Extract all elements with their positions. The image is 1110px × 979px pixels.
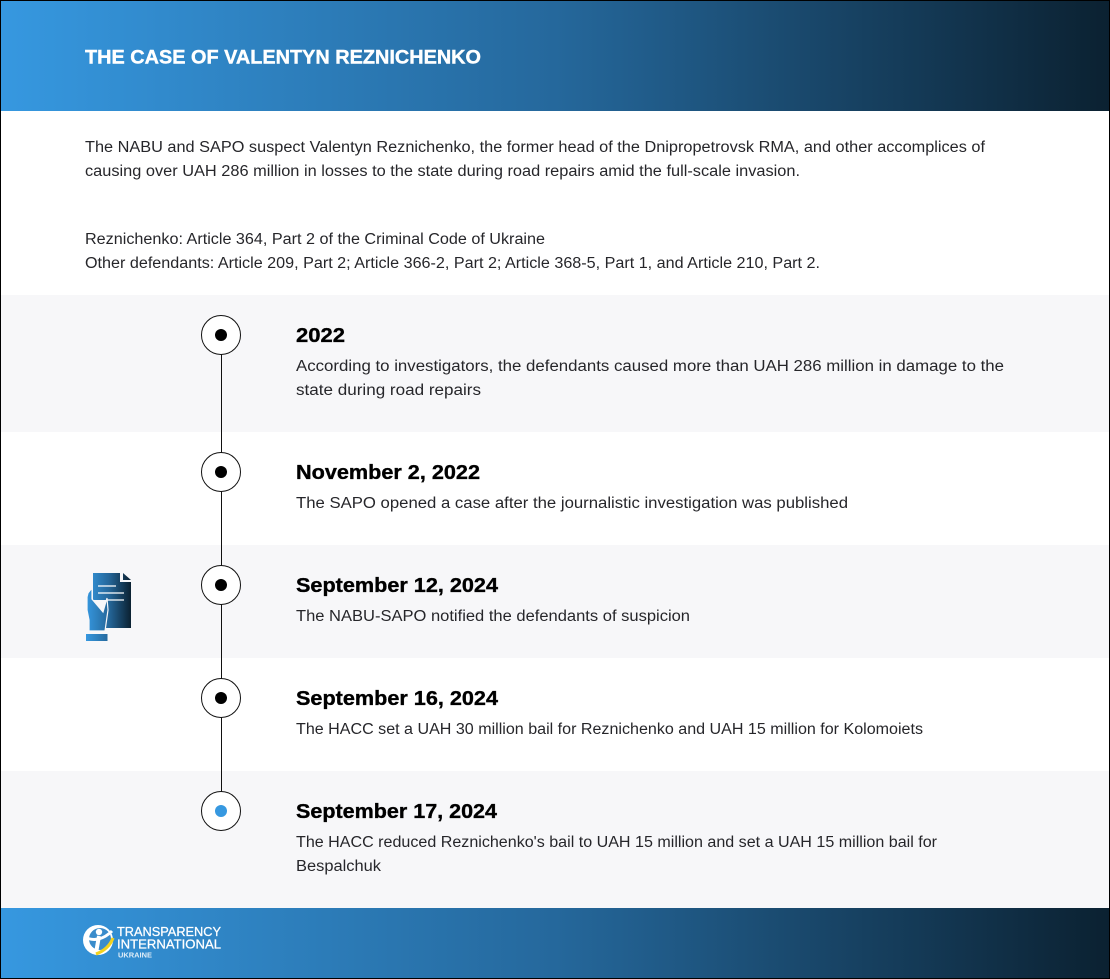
icon: hand holding document xyxy=(86,573,131,641)
event: November 2, 2022: The SAPO opened a case after the journalistic investigation was published xyxy=(296,495,848,512)
event: September 17, 2024: Bespalchuk xyxy=(296,858,381,875)
event: November 2, 2022 xyxy=(296,462,848,512)
legal articles text: Other defendants: Article 209, Part 2; Article 366-2, Part 2; Article 368-5, Part 1, and Article 210, Part 2. xyxy=(85,255,820,272)
event: November 2, 2022: November 2, 2022 xyxy=(296,462,480,484)
event: September 16, 2024 xyxy=(296,688,923,738)
event: September 17, 2024: September 17, 2024 xyxy=(296,801,498,823)
timeline marker: September 12, 2024 xyxy=(202,566,240,604)
legal articles text: Reznichenko: Article 364, Part 2 of the Criminal Code of Ukraine xyxy=(85,231,545,248)
event: 2022: 2022 xyxy=(296,325,345,347)
event: September 16, 2024: September 16, 2024 xyxy=(296,688,499,710)
intro text: The NABU and SAPO suspect Valentyn Reznichenko, the former head of the Dnipropetrovsk RMA, and other accomplices of xyxy=(85,139,986,156)
event: September 12, 2024: September 12, 2024 xyxy=(296,575,499,597)
logo: Transparency International Ukraine: INTERNATIONAL xyxy=(117,938,221,952)
intro text: causing over UAH 286 million in losses to the state during road repairs amid the full-scale invasion. xyxy=(85,163,800,180)
legal articles text xyxy=(85,231,820,272)
logo: Transparency International Ukraine xyxy=(83,925,222,960)
intro text xyxy=(85,139,986,180)
logo: Transparency International Ukraine: TRANSPARENCY xyxy=(117,925,222,939)
timeline connector line xyxy=(220,335,222,811)
event: 2022: According to investigators, the defendants caused more than UAH 286 million in damage to the xyxy=(296,358,1004,375)
event: September 12, 2024: The NABU-SAPO notified the defendants of suspicion xyxy=(296,608,690,625)
timeline marker: September 16, 2024 xyxy=(202,678,240,718)
title: THE CASE OF VALENTYN REZNICHENKO xyxy=(85,46,481,68)
timeline marker: September 17, 2024 xyxy=(202,792,240,830)
event: September 17, 2024: The HACC reduced Reznichenko's bail to UAH 15 million and set a UAH 15 million bail for xyxy=(296,834,937,851)
event: 2022 xyxy=(296,325,1004,399)
timeline band backgrounds xyxy=(1,295,1109,908)
event: September 12, 2024 xyxy=(296,575,690,625)
logo: Transparency International Ukraine: UKRAINE xyxy=(118,952,152,960)
footer banner xyxy=(1,908,1109,978)
event: 2022: state during road repairs xyxy=(296,382,481,399)
event: September 16, 2024: The HACC set a UAH 30 million bail for Reznichenko and UAH 15 million for Kolomoiets xyxy=(296,721,923,738)
timeline marker: 2022 xyxy=(202,316,240,354)
event: September 17, 2024 xyxy=(296,801,937,875)
timeline marker: November 2, 2022 xyxy=(202,452,240,492)
header banner xyxy=(1,1,1109,111)
